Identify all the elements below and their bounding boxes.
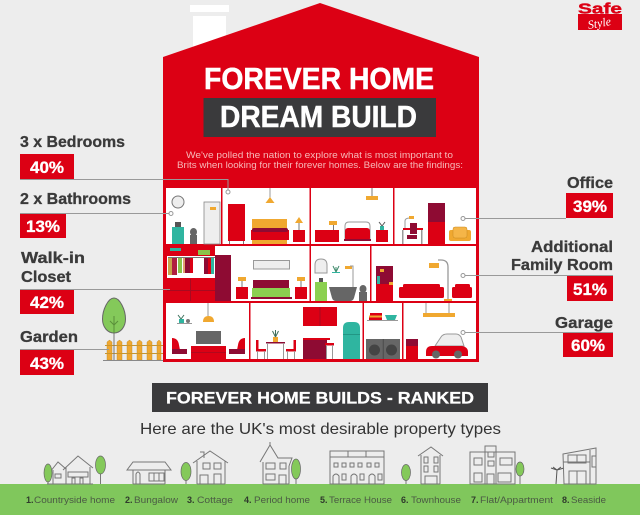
intro text: Brits when looking for their forever homes. Below are the findings: — [177, 160, 463, 170]
callout: 2 x Bathrooms — [20, 191, 173, 238]
intro text: We've polled the nation to explore what is most important to — [186, 150, 453, 160]
icon: period home — [260, 442, 292, 484]
property ranking labels: 7. — [471, 495, 479, 505]
icon: bungalow — [127, 462, 171, 484]
callout: Office: Office — [567, 175, 613, 192]
room: lounge — [172, 303, 245, 359]
subtitle banner: DREAM BUILD — [220, 99, 417, 134]
fence and tree — [102, 298, 163, 360]
room: bathroom middle — [315, 259, 367, 301]
property ranking labels — [26, 495, 606, 505]
house — [163, 3, 479, 362]
callout: 2 x Bathrooms: 13% — [26, 217, 60, 236]
icon: tree — [292, 459, 300, 484]
icon: palm tree — [551, 467, 564, 484]
callout: Walk-in Closet: Walk-in — [21, 250, 85, 267]
property ranking labels: 1. — [26, 495, 34, 505]
intro text — [177, 150, 463, 170]
callout: Walk-in Closet: 42% — [30, 293, 64, 312]
icon: tree — [516, 462, 524, 484]
callout: Additional Family Room: 51% — [573, 280, 607, 299]
callout: Garden — [20, 329, 109, 375]
icon: countryside home — [47, 456, 93, 484]
property ranking labels: Flat/Appartment — [480, 495, 554, 505]
room: office — [402, 203, 471, 244]
callout: Garden: Garden — [20, 329, 78, 346]
property ranking labels: Terrace House — [329, 495, 392, 505]
icon: terrace house — [330, 451, 384, 484]
room: garage — [406, 303, 468, 359]
callout: Garage: Garage — [555, 315, 613, 332]
callout: Walk-in Closet: Closet — [21, 269, 72, 286]
callout: Garage — [461, 315, 613, 357]
room: kitchen diner — [256, 307, 360, 359]
chimney — [190, 5, 229, 48]
callout: Office: 39% — [573, 197, 607, 216]
icon: tree — [402, 464, 410, 484]
property ranking labels: Countryside home — [34, 495, 115, 505]
room: master bedroom — [228, 188, 305, 244]
logo: Safe Style: Style — [587, 14, 613, 32]
property ranking labels: 6. — [401, 495, 409, 505]
callout: Additional Family Room — [461, 239, 613, 301]
callout: 3 x Bedrooms: 3 x Bedrooms — [20, 134, 125, 151]
room outlines — [166, 188, 476, 359]
callout: Additional Family Room: Family Room — [511, 257, 613, 274]
property ranking labels: 4. — [244, 495, 252, 505]
room: bathroom top — [172, 196, 220, 244]
icon: tree — [44, 464, 52, 484]
property ranking labels: 8. — [562, 495, 570, 505]
icon: townhouse — [418, 447, 443, 484]
icon: seaside house — [563, 448, 596, 484]
callout: Walk-in Closet — [20, 250, 170, 314]
ranked subheading: Here are the UK's most desirable property types — [140, 421, 501, 438]
property ranking labels: Bungalow — [134, 495, 179, 505]
property ranking labels: Cottage — [197, 495, 233, 505]
property ranking labels: 5. — [320, 495, 328, 505]
callout: Additional Family Room: Additional — [531, 239, 613, 256]
room: family room — [376, 260, 472, 301]
callout: 3 x Bedrooms: 40% — [30, 158, 64, 177]
property ranking labels: Seaside — [571, 495, 606, 505]
icon: car — [426, 334, 468, 358]
house icons row — [44, 442, 596, 484]
callout: Garage: 60% — [571, 336, 605, 355]
property ranking labels: 2. — [125, 495, 133, 505]
room: utility — [366, 313, 400, 359]
ranked banner — [152, 383, 488, 412]
logo: Safe Style: Safe — [578, 0, 622, 18]
title: FOREVER HOME — [204, 61, 434, 96]
ranked banner: FOREVER HOME BUILDS - RANKED — [166, 388, 474, 408]
icon: cottage — [193, 451, 228, 484]
callout: Office — [461, 175, 613, 220]
property ranking labels: Townhouse — [411, 495, 461, 505]
icon: flat — [470, 446, 515, 484]
room: bedroom three — [315, 188, 388, 242]
property ranking labels: Period home — [254, 495, 310, 505]
callout: 3 x Bedrooms — [20, 134, 230, 194]
room: walk-in closet — [167, 248, 231, 301]
green ground strip — [0, 484, 640, 515]
callout: 2 x Bathrooms: 2 x Bathrooms — [20, 191, 131, 208]
property ranking labels: 3. — [187, 495, 195, 505]
icon: tree — [96, 456, 106, 484]
callout: Garden: 43% — [30, 354, 64, 373]
logo: Safe Style — [578, 0, 622, 32]
room: green bedroom — [236, 260, 307, 299]
icon: tree — [181, 462, 191, 484]
